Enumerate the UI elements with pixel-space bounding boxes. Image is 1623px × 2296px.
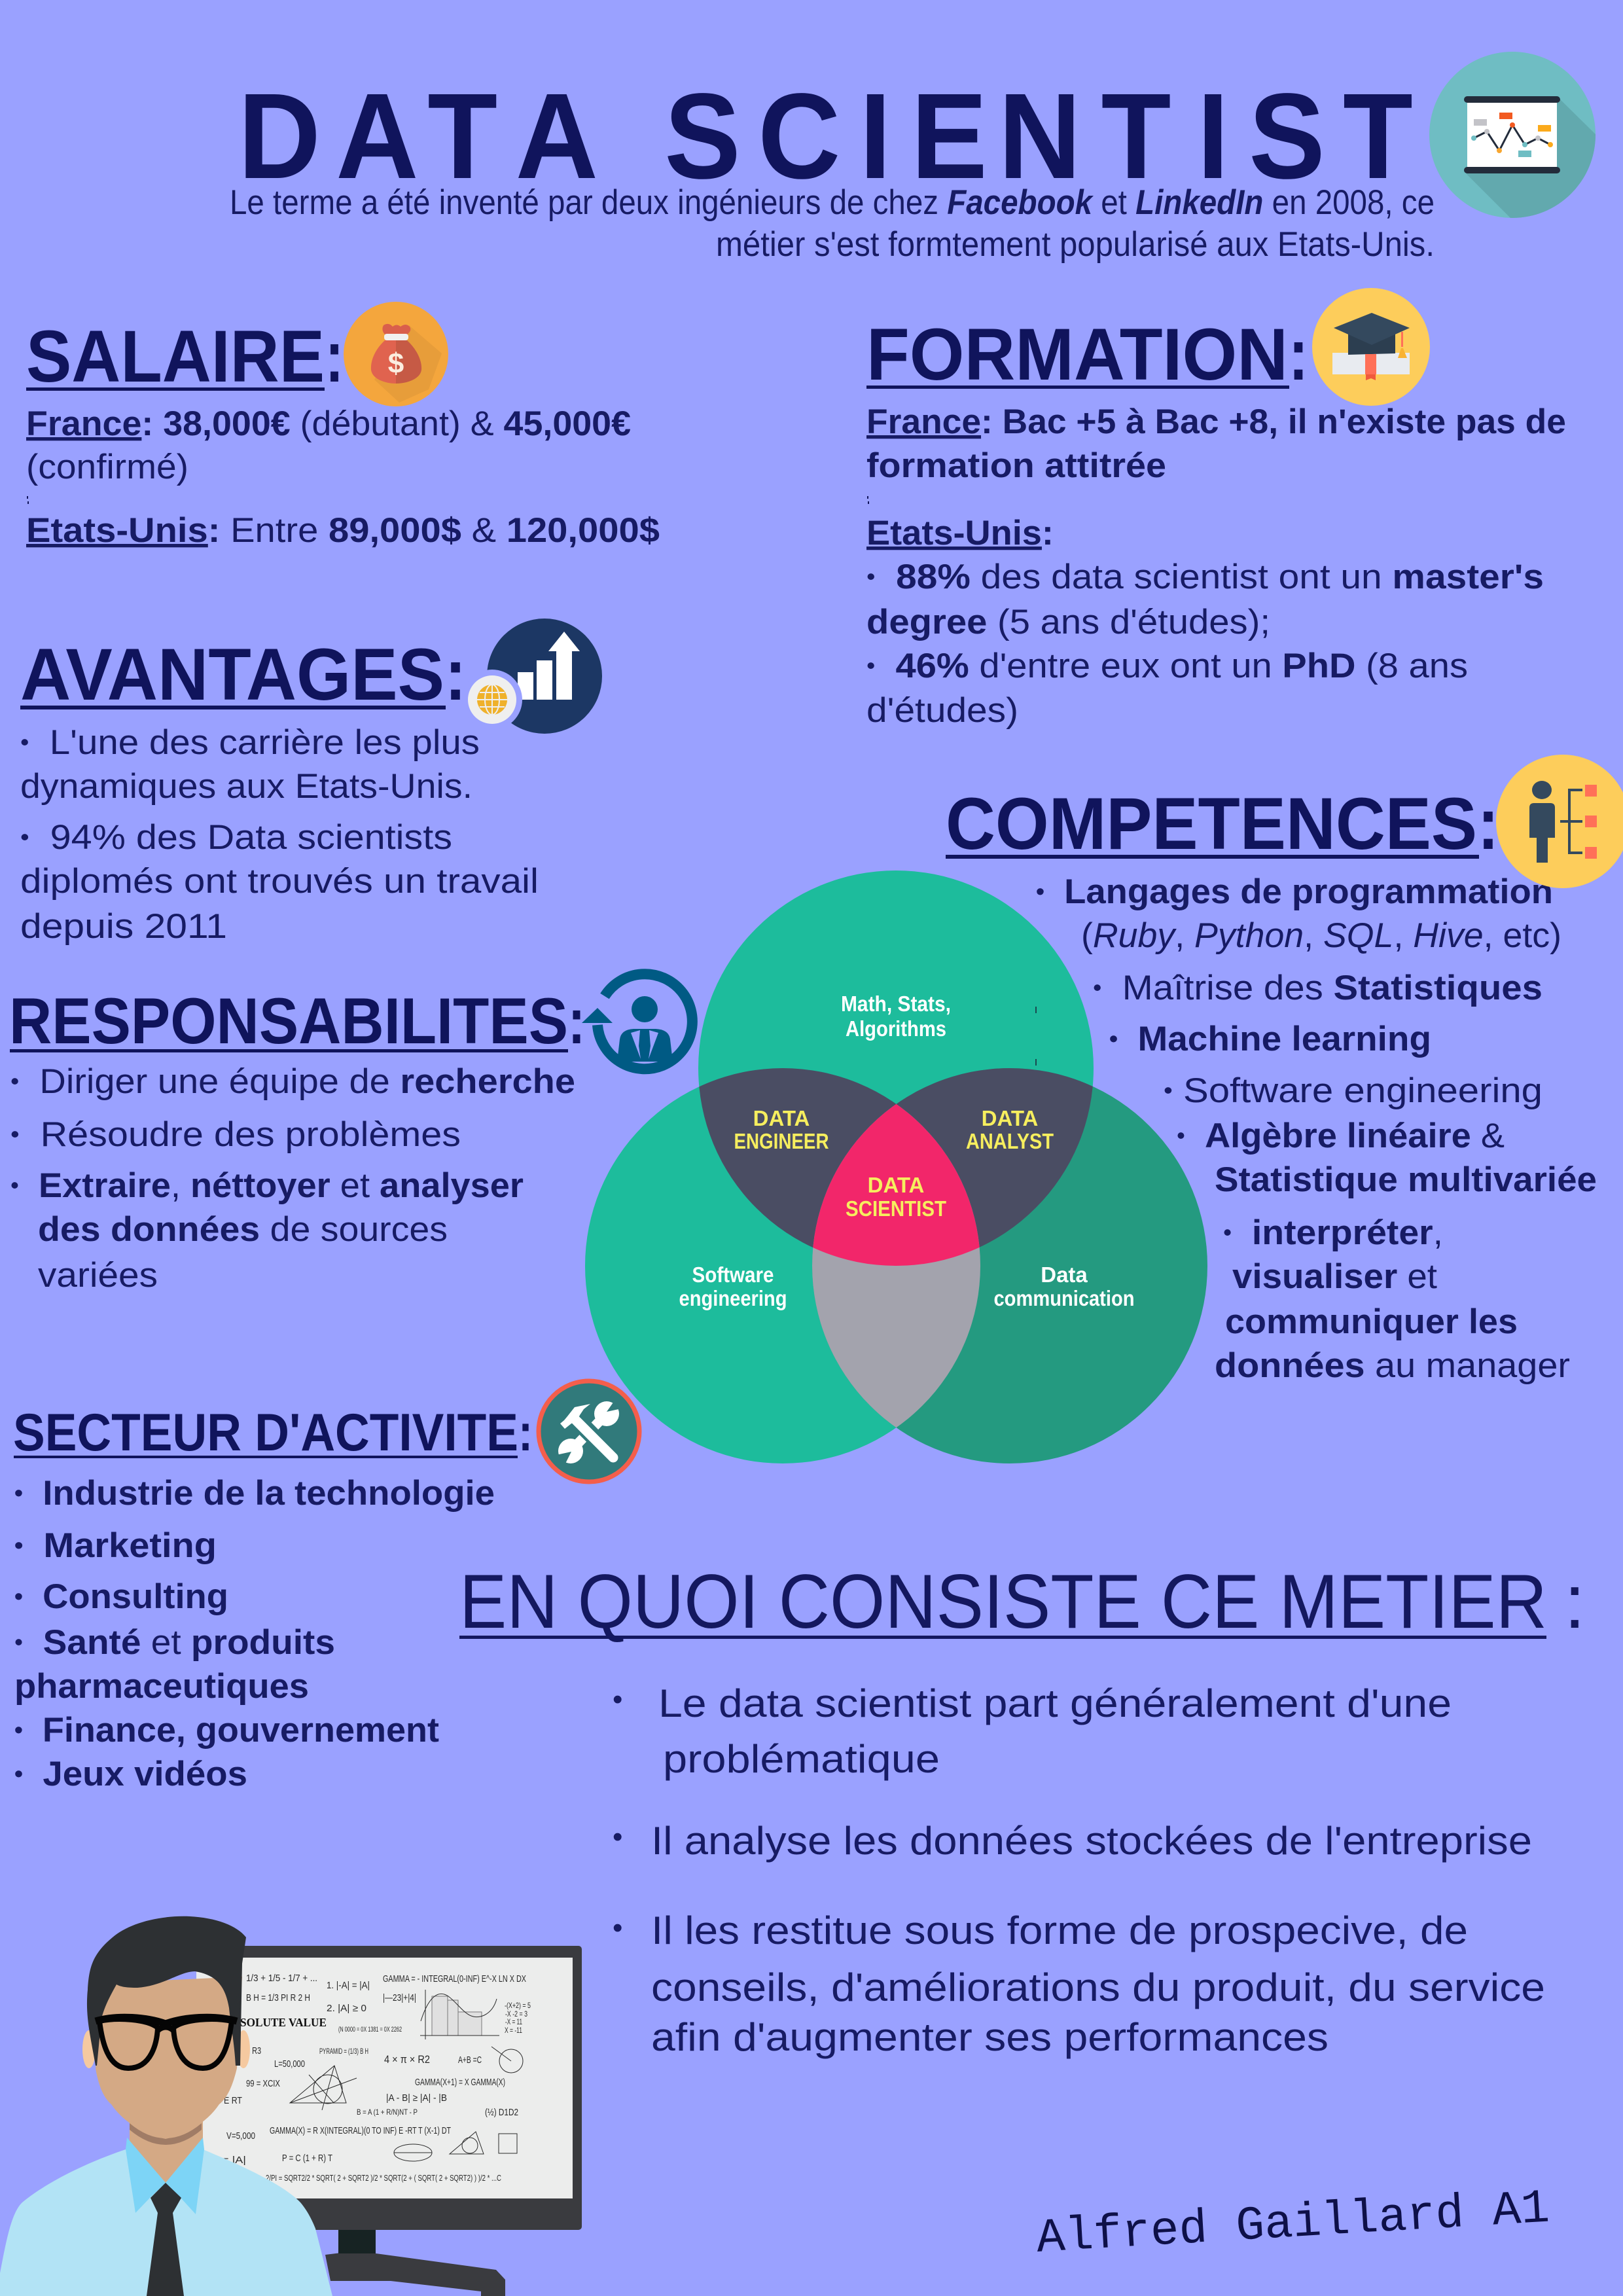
responsabilites text: variées <box>38 1256 158 1295</box>
metier text: • <box>613 1821 622 1853</box>
math formulas: -X = 11 <box>505 2017 522 2026</box>
panel: formation <box>866 288 1566 730</box>
venn diagram: SCIENTIST <box>846 1196 946 1221</box>
icon: person and org tree <box>1496 755 1623 888</box>
metier text: • <box>613 1683 622 1715</box>
venn diagram: Data <box>1041 1263 1088 1287</box>
venn diagram: Math, Stats, <box>841 992 951 1016</box>
monitor <box>196 1946 582 2296</box>
math formulas: 2/PI = SQRT2/2 * SQRT( 2 + SQRT2 )/2 * SQRT(2 + ( SQRT( 2 + SQRT2) ) )/2 * ...C <box>266 2173 501 2183</box>
responsabilites text: • Diriger une équipe de recherche <box>10 1062 575 1101</box>
math formulas: X = -11 <box>505 2026 522 2035</box>
secteur text: • Industrie de la technologie <box>14 1474 495 1513</box>
panel: secteur d'activite <box>13 1381 639 1793</box>
math formulas: (N 0000 = 0X 1381 = 0X 2262 <box>338 2026 402 2034</box>
responsabilites text: • Extraire, néttoyer et analyser <box>10 1166 524 1205</box>
math drawings <box>290 1990 523 2161</box>
venn diagram: DATA <box>982 1106 1038 1130</box>
competences text: • Langages de programmation <box>1036 872 1553 911</box>
math formulas: 2 R3 <box>246 2045 261 2056</box>
avantages text: dynamiques aux Etats-Unis. <box>20 767 473 806</box>
salaire text: Etats-Unis : Entre 89,000$ & 120,000$ <box>26 511 660 550</box>
title: DATA <box>238 69 598 204</box>
secteur text: pharmaceutiques <box>14 1667 309 1706</box>
math formulas: A+B =C <box>458 2054 482 2066</box>
competences text: • Algèbre linéaire & <box>1177 1117 1505 1155</box>
competences text: données au manager <box>1215 1346 1570 1385</box>
avantages text: depuis 2011 <box>20 907 227 946</box>
math formulas: L=50,000 <box>274 2058 305 2070</box>
responsabilites text <box>10 1062 575 1295</box>
salaire text <box>26 404 660 550</box>
formation text <box>866 403 1566 730</box>
heading: competences: COMPETENCES <box>946 783 1477 865</box>
math formulas: B H = 1/3 PI R 2 H <box>246 1992 310 2003</box>
heading: en quoi consiste ce metier: : <box>1564 1558 1586 1644</box>
heading: competences: : <box>1478 783 1499 865</box>
formation text: • 88% des data scientist ont un master's <box>866 558 1544 596</box>
math formulas: SOLUTE VALUE <box>240 2016 327 2029</box>
metier text <box>613 1681 1545 2059</box>
math formulas: |A - B| ≥ |A| - |B <box>386 2092 447 2104</box>
icon: hammer and wrench <box>539 1381 639 1482</box>
formation text: d'études) <box>866 691 1018 730</box>
metier text: Il les restitue sous forme de prospecive, de <box>651 1909 1468 1952</box>
panel: avantages <box>20 619 602 946</box>
math formulas: = |A| <box>222 2155 246 2166</box>
responsabilites text: • Résoudre des problèmes <box>10 1115 461 1154</box>
signature: Alfred Gaillard A1 <box>1035 2181 1551 2266</box>
metier text: Il analyse les données stockées de l'entreprise <box>651 1819 1532 1863</box>
math formulas: 4 × π × R2 <box>384 2053 430 2066</box>
avantages text: • L'une des carrière les plus <box>20 723 480 762</box>
heading: responsabilites: RESPONSABILITES <box>9 984 568 1057</box>
competences text: visualiser et <box>1232 1257 1437 1296</box>
avantages text: diplomés ont trouvés un travail <box>20 862 539 901</box>
math formulas: GAMMA(X) = R X(INTEGRAL)(0 TO INF) E -RT T (X-1) DT <box>270 2125 451 2136</box>
math formulas: |—23|+|4| <box>383 1992 416 2003</box>
venn diagram: engineering <box>679 1286 787 1310</box>
metier text: afin d'augmenter ses performances <box>651 2015 1329 2059</box>
heading: salaire: SALAIRE <box>26 315 325 397</box>
math formulas: (½) D1D2 <box>485 2107 518 2118</box>
formation text: degree (5 ans d'études); <box>866 603 1270 641</box>
math formulas: V=5,000 <box>226 2130 255 2142</box>
competences text: Statistique multivariée <box>1215 1160 1597 1199</box>
venn diagram: ANALYST <box>966 1129 1054 1153</box>
math formulas: PYRAMID = (1/3) B H <box>319 2047 368 2056</box>
math formulas: P = C (1 + R) T <box>282 2153 332 2164</box>
icon: money bag <box>344 302 448 406</box>
math formulas: 2. |A| ≥ 0 <box>327 2003 366 2014</box>
formation text: formation attitrée <box>866 446 1166 485</box>
secteur text: • Jeux vidéos <box>14 1755 247 1793</box>
competences text: • Maîtrise des Statistiques <box>1093 969 1543 1007</box>
heading: avantages: AVANTAGES <box>20 634 444 715</box>
competences text: • interpréter, <box>1223 1213 1443 1252</box>
venn diagram: DATA <box>868 1173 924 1197</box>
glasses <box>96 2017 237 2068</box>
math formulas: E RT <box>224 2095 242 2106</box>
intro text <box>230 183 1435 264</box>
icon: presentation chart <box>1429 52 1600 226</box>
heading: en quoi consiste ce metier: EN QUOI CONSISTE CE METIER <box>459 1558 1547 1644</box>
math formulas: GAMMA(X+1) = X GAMMA(X) <box>415 2077 505 2088</box>
math formulas: GAMMA = - INTEGRAL(0-INF) E^-X LN X DX <box>383 1973 526 1984</box>
secteur text: • Finance, gouvernement <box>14 1711 439 1749</box>
competences text <box>1036 872 1597 1385</box>
icon: graduation cap <box>1312 288 1430 406</box>
secteur text: • Marketing <box>14 1526 217 1565</box>
avantages text: • 94% des Data scientists <box>20 818 452 857</box>
metier text: Le data scientist part généralement d'une <box>658 1681 1452 1725</box>
intro text: métier s'est formtement popularisé aux Etats-Unis. <box>716 225 1435 264</box>
heading: responsabilites: : <box>568 984 585 1057</box>
person <box>0 1916 332 2296</box>
metier text: problématique <box>663 1737 940 1781</box>
avantages text <box>20 723 539 946</box>
panel: en quoi consiste ce metier <box>459 1558 1586 2059</box>
salaire text: (confirmé) <box>26 448 188 486</box>
math formulas: 99 = XCIX <box>246 2078 280 2089</box>
venn diagram: Software <box>692 1263 774 1287</box>
panel: competences <box>946 755 1623 1385</box>
competences text: • Machine learning <box>1109 1020 1431 1058</box>
intro text: Le terme a été inventé par deux ingénieurs de chez Facebook et LinkedIn en 2008, ce <box>230 183 1435 222</box>
math formulas: -X -2 = 3 <box>505 2009 527 2018</box>
heading: secteur d'activite: : <box>518 1403 533 1462</box>
illustration: data scientist at monitor <box>0 1916 582 2296</box>
panel: responsabilites <box>9 974 692 1295</box>
competences text: (Ruby, Python, SQL, Hive, etc) <box>1081 916 1561 955</box>
metier text: conseils, d'améliorations du produit, du service <box>651 1965 1545 2009</box>
title: SCIENTIST <box>664 69 1413 204</box>
salaire text: France: 38,000€ (débutant) & 45,000€ <box>26 404 631 443</box>
heading: formation: FORMATION <box>866 314 1288 395</box>
competences text: • Software engineering <box>1164 1071 1543 1110</box>
venn diagram: Algorithms <box>846 1016 946 1041</box>
heading: avantages: : <box>445 634 466 715</box>
secteur text: • Santé et produits <box>14 1623 335 1662</box>
venn diagram: ENGINEER <box>734 1129 829 1153</box>
responsabilites text: des données de sources <box>38 1210 448 1249</box>
icon: growth chart and globe <box>462 619 602 734</box>
heading: formation: : <box>1289 314 1308 395</box>
math formulas <box>222 1973 531 2183</box>
secteur text <box>14 1474 495 1793</box>
competences text: communiquer les <box>1225 1302 1518 1341</box>
formation text: • 46% d'entre eux ont un PhD (8 ans <box>866 647 1468 685</box>
math formulas: -(X+2) = 5 <box>505 2001 531 2010</box>
venn diagram: DATA <box>753 1106 810 1130</box>
heading: secteur d'activite: SECTEUR D'ACTIVITE <box>13 1403 518 1462</box>
math formulas: 1/3 + 1/5 - 1/7 + ... <box>246 1973 317 1984</box>
heading: salaire: : <box>325 315 344 397</box>
math formulas: B = A (1 + R/N)NT - P <box>357 2108 418 2117</box>
icon: person in circular arrow <box>582 974 692 1069</box>
formation text: France: Bac +5 à Bac +8, il n'existe pas de <box>866 403 1566 441</box>
venn diagram: communication <box>993 1286 1135 1310</box>
venn diagram <box>585 870 1207 1463</box>
formation text: Etats-Unis: <box>866 514 1054 552</box>
secteur text: • Consulting <box>14 1577 228 1616</box>
panel: salaire <box>26 302 660 550</box>
icon: money bag: $ <box>388 348 404 380</box>
math formulas: 1. |-A| = |A| <box>327 1980 370 1991</box>
metier text: • <box>613 1912 622 1944</box>
